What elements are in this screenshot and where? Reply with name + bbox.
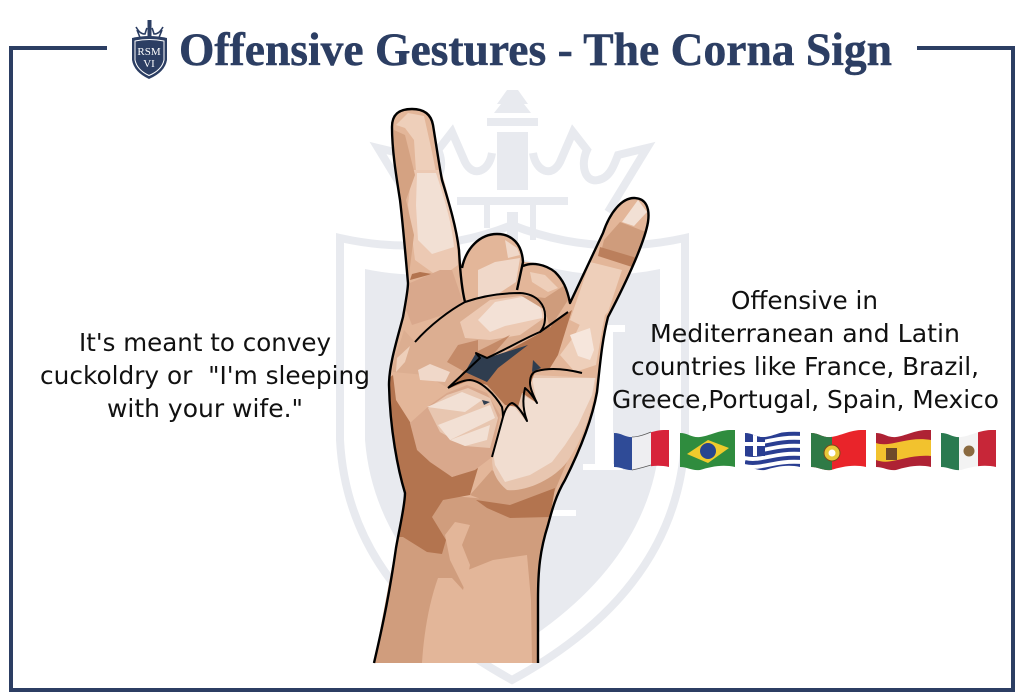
index finger highlights	[396, 113, 436, 172]
title: Offensive Gestures - The Corna Sign	[179, 24, 892, 76]
text block: meaning: with your wife."	[107, 394, 303, 423]
logo: VI	[143, 58, 155, 70]
text block: where offensive: countries like France, Brazil,	[631, 352, 979, 381]
logo	[132, 20, 167, 79]
text block: meaning	[40, 328, 370, 423]
forearm light highlight	[445, 522, 470, 590]
pinky highlights	[622, 200, 647, 226]
flag: Brazil	[680, 430, 735, 470]
flag: Greece	[745, 432, 800, 470]
text block: meaning: cuckoldry or "I'm sleeping	[40, 361, 370, 390]
crevice	[465, 345, 541, 405]
flags row	[614, 430, 996, 470]
watermark: crest behind hand	[340, 90, 685, 680]
thumb mound	[410, 385, 500, 477]
right palm shading	[492, 375, 596, 490]
wrist dark band	[476, 488, 555, 518]
middle finger highlights	[478, 258, 520, 298]
left dark palm	[389, 375, 478, 554]
hand base	[374, 109, 648, 663]
ring finger highlights	[530, 272, 558, 292]
arm mid shadow	[374, 495, 552, 663]
outline	[374, 109, 648, 663]
wrist mid band	[470, 455, 570, 510]
thumb and crease lines	[415, 293, 582, 457]
text block: meaning: It's meant to convey	[79, 328, 331, 357]
flag: Spain	[876, 430, 931, 470]
text block: where offensive: Mediterranean and Latin	[650, 319, 960, 348]
flag: Mexico	[941, 430, 996, 470]
logo: RSM	[137, 46, 161, 58]
right palm light	[493, 378, 595, 482]
text block: where offensive	[612, 286, 999, 414]
illustration: hand making corna sign	[374, 109, 648, 663]
text block: where offensive: Greece,Portugal, Spain, Mexico	[612, 385, 999, 414]
flag: Portugal	[811, 430, 866, 470]
thumb shading	[393, 293, 545, 388]
flag: France	[614, 430, 669, 470]
text block: where offensive: Offensive in	[731, 286, 878, 315]
inner palm dark	[450, 310, 572, 407]
